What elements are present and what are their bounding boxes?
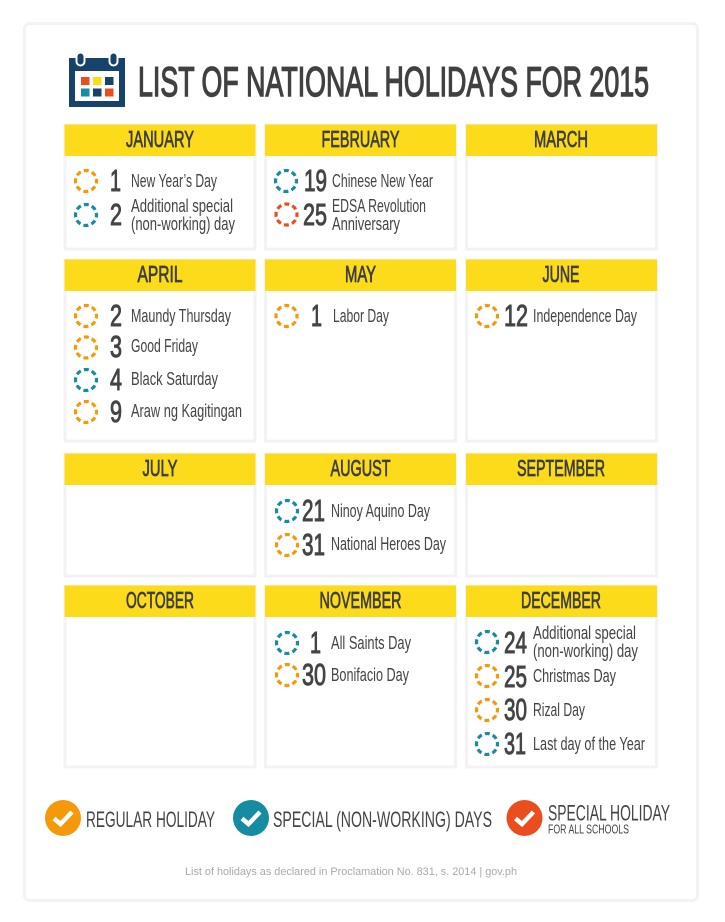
icon: regular holiday marker (476, 306, 498, 326)
label: Labor Day: Labor Day (333, 305, 389, 326)
heading: November: NOVEMBER (320, 587, 402, 613)
date: 1: 1 (110, 163, 121, 198)
icon: special day marker (276, 500, 298, 522)
label: All Saints Day: All Saints Day (331, 632, 412, 653)
label: Last day of the Year: Last day of the Year (533, 733, 645, 754)
heading: May: MAY (345, 261, 376, 287)
date: 30: 30 (504, 692, 527, 727)
date: 25: 25 (504, 659, 527, 694)
legend: special non-working days (233, 800, 492, 836)
icon: teal check (233, 800, 269, 836)
date: 4: 4 (110, 362, 122, 397)
icon: special day marker (476, 734, 498, 754)
label: New Year's Day: New Year’s Day (131, 170, 217, 191)
panel: May (265, 260, 456, 441)
date: 25: 25 (303, 197, 327, 232)
date: 1: 1 (311, 298, 322, 333)
icon: regular holiday marker (476, 700, 498, 720)
label: additional special: (non-working) day (533, 640, 639, 661)
icon: regular holiday marker (76, 306, 96, 326)
panel: July (64, 454, 256, 576)
label: Rizal Day: Rizal Day (533, 699, 585, 720)
label: EDSA Revolution Anniversary (332, 195, 426, 234)
label: additional special: (non-working) day (131, 213, 236, 234)
date: 12: 12 (504, 298, 528, 333)
heading: April: APRIL (138, 261, 183, 287)
date: 24: 24 (504, 625, 527, 660)
icon: special day marker (76, 204, 96, 226)
icon: regular holiday marker (276, 534, 298, 556)
label: Good Friday: Good Friday (131, 335, 198, 356)
label: Maundy Thursday: Maundy Thursday (131, 305, 231, 326)
icon: orange check (45, 800, 81, 836)
icon: special day marker (76, 370, 96, 390)
footer note: List of holidays as declared in Proclamation No. 831, s. 2014 | gov.ph (185, 866, 517, 878)
icon: regular holiday marker (76, 337, 96, 358)
label: Black Saturday: Black Saturday (131, 368, 219, 389)
label: additional special (533, 622, 639, 661)
panel: October (64, 586, 256, 767)
panel: April (64, 260, 256, 441)
label: Christmas Day: Christmas Day (533, 665, 617, 686)
legend: regular holiday (45, 800, 215, 836)
panel: December (466, 586, 657, 767)
label: Independence Day: Independence Day (533, 305, 637, 326)
date: 30: 30 (302, 657, 326, 692)
date: 19: 19 (304, 163, 327, 198)
date: 2: 2 (110, 197, 122, 232)
icon: special day marker (476, 632, 498, 652)
heading: June: JUNE (542, 261, 580, 287)
heading: August: AUGUST (330, 455, 390, 481)
legend: special holiday (506, 800, 670, 836)
icon: red check (506, 800, 542, 836)
panel: September (466, 454, 657, 576)
date: 31: 31 (504, 726, 526, 761)
date: 1: 1 (310, 625, 321, 660)
heading: October: OCTOBER (126, 587, 194, 613)
panel: March (466, 124, 657, 249)
date: 3: 3 (110, 329, 122, 364)
heading: February: FEBRUARY (322, 126, 400, 152)
icon: regular holiday marker (76, 170, 96, 192)
panel: January (64, 124, 256, 249)
icon: regular holiday marker (476, 666, 498, 686)
label: Chinese New Year: Chinese New Year (332, 170, 433, 191)
label: Araw ng Kagitingan: Araw ng Kagitingan (131, 400, 242, 421)
icon: special day marker (276, 170, 296, 192)
heading: December: DECEMBER (521, 587, 601, 613)
label: EDSA Revolution Anniversary: Anniversary (332, 213, 401, 234)
panel: June (466, 260, 657, 441)
icon: special holiday marker (276, 204, 297, 225)
heading: July: JULY (142, 455, 178, 481)
panel: November (265, 586, 456, 767)
label: additional special: Additional special (533, 622, 636, 643)
legend label: special non-working days: SPECIAL (NON-WORKING) DAYS (273, 807, 492, 832)
heading: March: MARCH (534, 126, 588, 152)
label: EDSA Revolution Anniversary: EDSA Revolution (332, 195, 426, 216)
heading: January: JANUARY (126, 126, 194, 152)
date: 2: 2 (110, 298, 122, 333)
label: National Heroes Day: National Heroes Day (331, 533, 446, 554)
label: additional special (131, 195, 236, 234)
panel: August (265, 454, 456, 576)
label: Bonifacio Day: Bonifacio Day (331, 664, 410, 685)
legend label: special holiday (548, 800, 670, 836)
icon: special day marker (276, 632, 298, 654)
icon: regular holiday marker (76, 402, 96, 422)
panel: February (265, 124, 456, 249)
label: Ninoy Aquino Day: Ninoy Aquino Day (331, 500, 431, 521)
heading: September: SEPTEMBER (517, 455, 605, 481)
icon: calendar (69, 52, 125, 107)
icon: regular holiday marker (276, 664, 298, 686)
legend label: regular holiday: REGULAR HOLIDAY (86, 807, 215, 832)
date: 21: 21 (302, 493, 325, 528)
date: 31: 31 (302, 527, 325, 562)
date: 9: 9 (110, 394, 122, 429)
icon: regular holiday marker (276, 306, 297, 326)
label: additional special: Additional special (131, 195, 233, 216)
legend label: special holiday: FOR ALL SCHOOLS (548, 822, 629, 836)
